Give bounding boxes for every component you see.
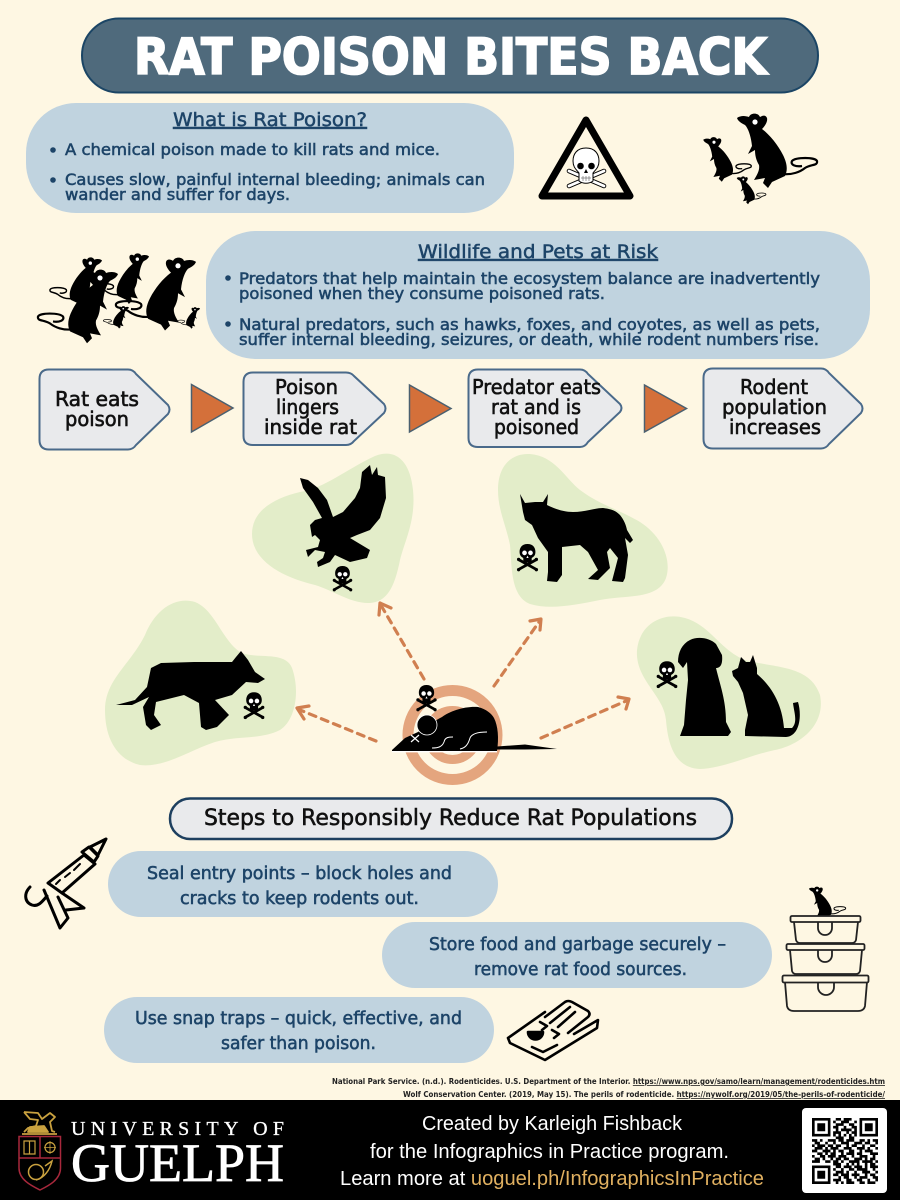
title banner: RAT POISON BITES BACK bbox=[134, 28, 769, 86]
icon: poison warning triangle bbox=[542, 120, 630, 196]
panel: what is rat poison bbox=[26, 103, 514, 213]
logo: wordmark: GUELPH bbox=[71, 1133, 284, 1193]
step: seal entry points: Seal entry points – block holes and bbox=[147, 864, 452, 884]
icon: caulk gun bbox=[26, 839, 106, 928]
arrow: flow 3 to 4 bbox=[644, 385, 686, 432]
flow step 1 bbox=[40, 370, 170, 450]
step: store food: remove rat food sources. bbox=[474, 960, 687, 980]
icon: skull bbox=[333, 566, 352, 591]
flow step 2: Poison bbox=[275, 375, 338, 399]
bullet list: poisoned when they consume poisoned rats. bbox=[239, 284, 605, 303]
flow step 3 bbox=[468, 370, 622, 447]
heading: wildlife and pets: Wildlife and Pets at Risk bbox=[418, 241, 658, 263]
bullet list: Natural predators, such as hawks, foxes, and coyotes, as well as pets, bbox=[239, 315, 820, 334]
credit text: Created by Karleigh Fishback bbox=[422, 1113, 683, 1135]
step: seal entry points: cracks to keep rodents out. bbox=[180, 889, 419, 909]
bullet list: suffer internal bleeding, seizures, or death, while rodent numbers rise. bbox=[239, 330, 819, 349]
footer bbox=[0, 1100, 900, 1200]
arrow: to hawk bbox=[379, 603, 424, 679]
flow step 4: increases bbox=[729, 415, 821, 439]
credit text bbox=[340, 1113, 764, 1190]
pets panel bbox=[637, 616, 821, 769]
lynx panel bbox=[498, 454, 668, 607]
bullet list bbox=[225, 269, 820, 349]
step: store food: Store food and garbage securely – bbox=[429, 935, 726, 955]
flow step 3: poisoned bbox=[494, 415, 579, 439]
logo: shield bbox=[19, 1136, 60, 1190]
flow step 2 bbox=[244, 372, 386, 445]
arrow: flow 2 to 3 bbox=[410, 385, 451, 432]
step: snap traps: safer than poison. bbox=[221, 1034, 376, 1054]
heading: steps bbox=[170, 798, 732, 839]
flow step 1: Rat eats bbox=[55, 387, 139, 411]
coyote panel bbox=[105, 601, 296, 765]
flow step 4: Rodent bbox=[740, 375, 808, 399]
flow step 1: poison bbox=[65, 407, 129, 431]
arrow: to lynx bbox=[494, 619, 541, 686]
credit text: Learn more at uoguel.ph/InfographicsInPractice bbox=[340, 1168, 764, 1190]
bullet list: wander and suffer for days. bbox=[65, 185, 290, 204]
icon: rats group left bbox=[38, 253, 200, 343]
flow step 3: Predator eats bbox=[472, 375, 601, 399]
bullet list: Causes slow, painful internal bleeding; animals can bbox=[65, 170, 485, 189]
bullet list bbox=[50, 140, 485, 204]
icon: stacked food containers with rat bbox=[782, 887, 868, 1011]
icon: skull bbox=[244, 692, 264, 719]
QR code bbox=[802, 1108, 887, 1193]
arrow: flow 1 to 2 bbox=[192, 384, 233, 432]
logo: griffin crest bbox=[22, 1112, 57, 1134]
hawk panel bbox=[252, 454, 414, 603]
heading: steps: Steps to Responsibly Reduce Rat Populations bbox=[204, 806, 697, 831]
icon: dog bbox=[678, 638, 731, 736]
icon: skull bbox=[657, 661, 677, 688]
icon: rats group top right bbox=[703, 114, 817, 204]
flow step 2: lingers bbox=[276, 395, 339, 419]
arrow: to coyote bbox=[297, 706, 376, 741]
heading: what is rat poison: What is Rat Poison? bbox=[173, 109, 367, 131]
step: store food bbox=[382, 922, 772, 988]
logo: wordmark: UNIVERSITY OF bbox=[71, 1118, 284, 1140]
sources bbox=[332, 1077, 885, 1099]
step: snap traps bbox=[104, 997, 494, 1063]
flow step 3: rat and is bbox=[491, 395, 581, 419]
icon: skull bbox=[517, 544, 538, 571]
flow step 2: inside rat bbox=[264, 415, 357, 439]
flow step 4 bbox=[704, 368, 862, 448]
icon: cat bbox=[732, 655, 800, 737]
bullet list: Predators that help maintain the ecosystem balance are inadvertently bbox=[239, 269, 820, 288]
step: seal entry points bbox=[108, 851, 498, 917]
icon: hawk bbox=[300, 465, 386, 567]
bullet list: A chemical poison made to kill rats and mice. bbox=[65, 140, 440, 159]
arrow: to pets bbox=[541, 697, 629, 738]
icon: lynx bbox=[520, 494, 633, 582]
icon: snap trap bbox=[508, 1001, 598, 1060]
flow step 4: population bbox=[722, 395, 827, 419]
credit text: for the Infographics in Practice program. bbox=[370, 1141, 729, 1163]
icon: poisoned rat on target bbox=[392, 685, 557, 780]
icon: coyote bbox=[116, 651, 265, 730]
step: snap traps: Use snap traps – quick, effective, and bbox=[135, 1009, 462, 1029]
icon: skull bbox=[416, 685, 437, 711]
panel: wildlife and pets at risk bbox=[206, 231, 870, 359]
sources: Wolf Conservation Center. (2019, May 15). The perils of rodenticide. https://nywolf.org/2019/05/the-perils-of-rodenticide/ bbox=[403, 1090, 885, 1099]
